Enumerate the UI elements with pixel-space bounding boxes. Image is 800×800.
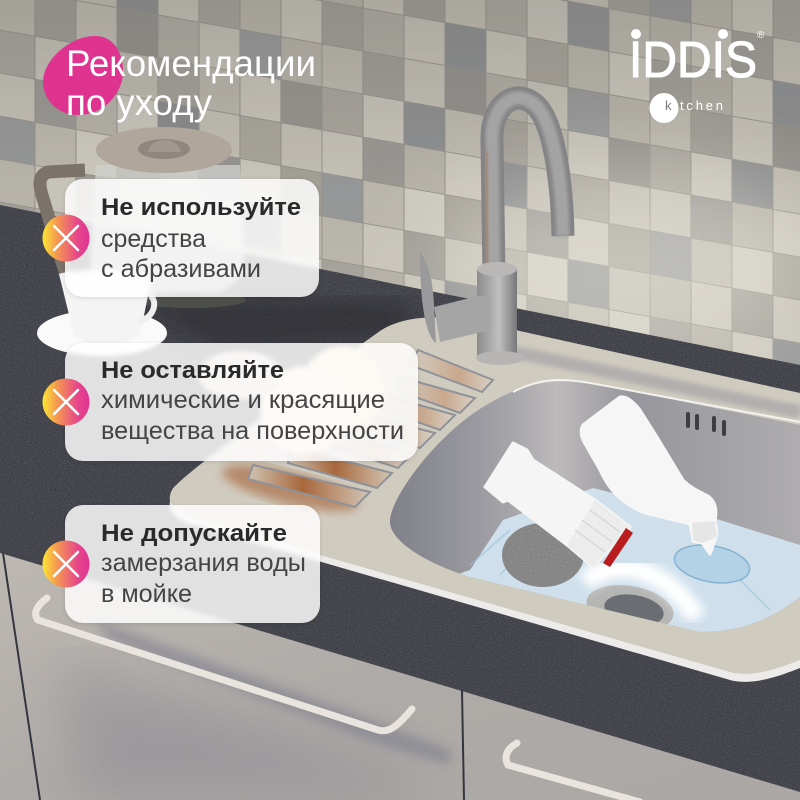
stainless steel sink rim <box>170 317 800 682</box>
logo wordmark: ® <box>757 30 765 41</box>
callout text <box>101 357 404 445</box>
callout text: замерзания воды <box>101 549 306 577</box>
title pink blob <box>43 36 123 115</box>
callout text: Не допускайте <box>101 520 287 547</box>
title second line: по уходу <box>66 82 212 123</box>
sink basin <box>380 370 800 640</box>
eggs on the drainboard <box>198 346 385 454</box>
callout text <box>101 520 306 608</box>
tiled wall <box>0 0 800 400</box>
powder canister with red cap <box>485 443 633 567</box>
title <box>43 36 316 123</box>
overflow holes <box>688 414 724 434</box>
kitchen mark <box>650 93 723 123</box>
callout text: с абразивами <box>101 255 261 283</box>
title text: Рекомендации <box>66 43 316 84</box>
callout: do not allow freezing <box>42 504 322 624</box>
callout: do not leave chemicals <box>42 342 419 463</box>
logo wordmark: IDDIS <box>629 31 757 88</box>
callout: do not use abrasives <box>42 179 320 300</box>
callout text: средства <box>101 225 206 253</box>
kitchen mark: kitchen <box>665 98 723 113</box>
icon: cross <box>42 540 90 588</box>
callout text: вещества на поверхности <box>101 417 404 445</box>
callout text: Не используйте <box>101 194 301 221</box>
steel wool scourer <box>502 523 584 587</box>
rim highlight <box>513 380 800 422</box>
faucet <box>420 98 563 365</box>
logo <box>629 29 765 123</box>
cabinet doors and handles <box>0 553 800 800</box>
callout text: химические и красящие <box>101 386 385 414</box>
cleaning bottle <box>581 397 717 554</box>
granite countertop <box>0 205 800 792</box>
icon: cross <box>42 214 90 262</box>
drainboard ribs <box>248 350 493 507</box>
callout text: Не оставляйте <box>101 357 284 384</box>
cup and saucer <box>37 270 167 356</box>
callout text <box>101 194 301 283</box>
icon: cross <box>42 378 90 426</box>
callout text: в мойке <box>101 580 192 608</box>
coffee pot <box>40 127 246 308</box>
